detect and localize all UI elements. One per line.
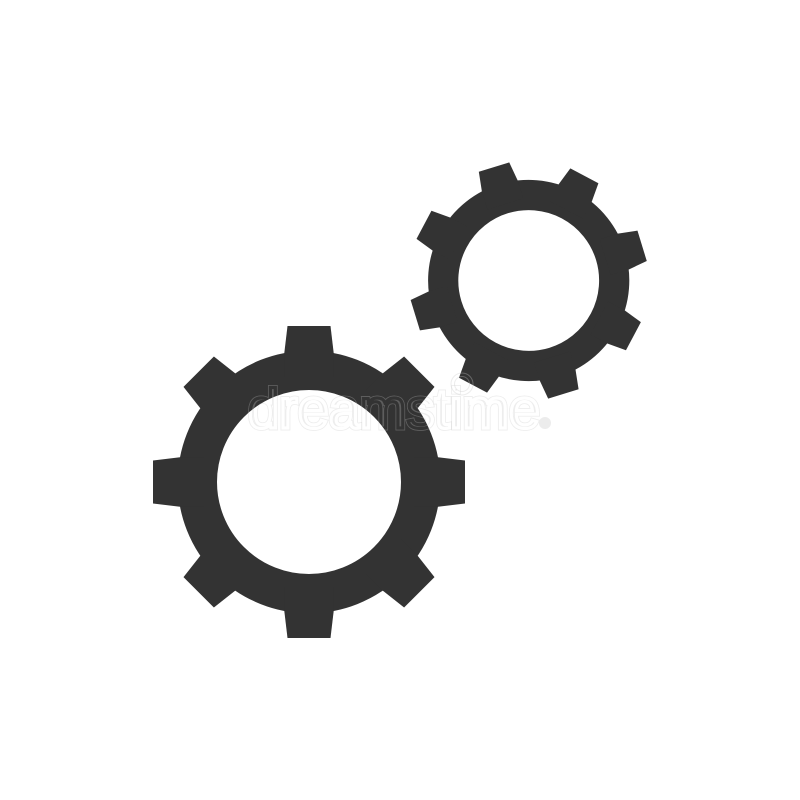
icon: small gear (381, 132, 677, 429)
icon: large gear (153, 326, 465, 638)
watermark: dreamstime (248, 377, 540, 440)
